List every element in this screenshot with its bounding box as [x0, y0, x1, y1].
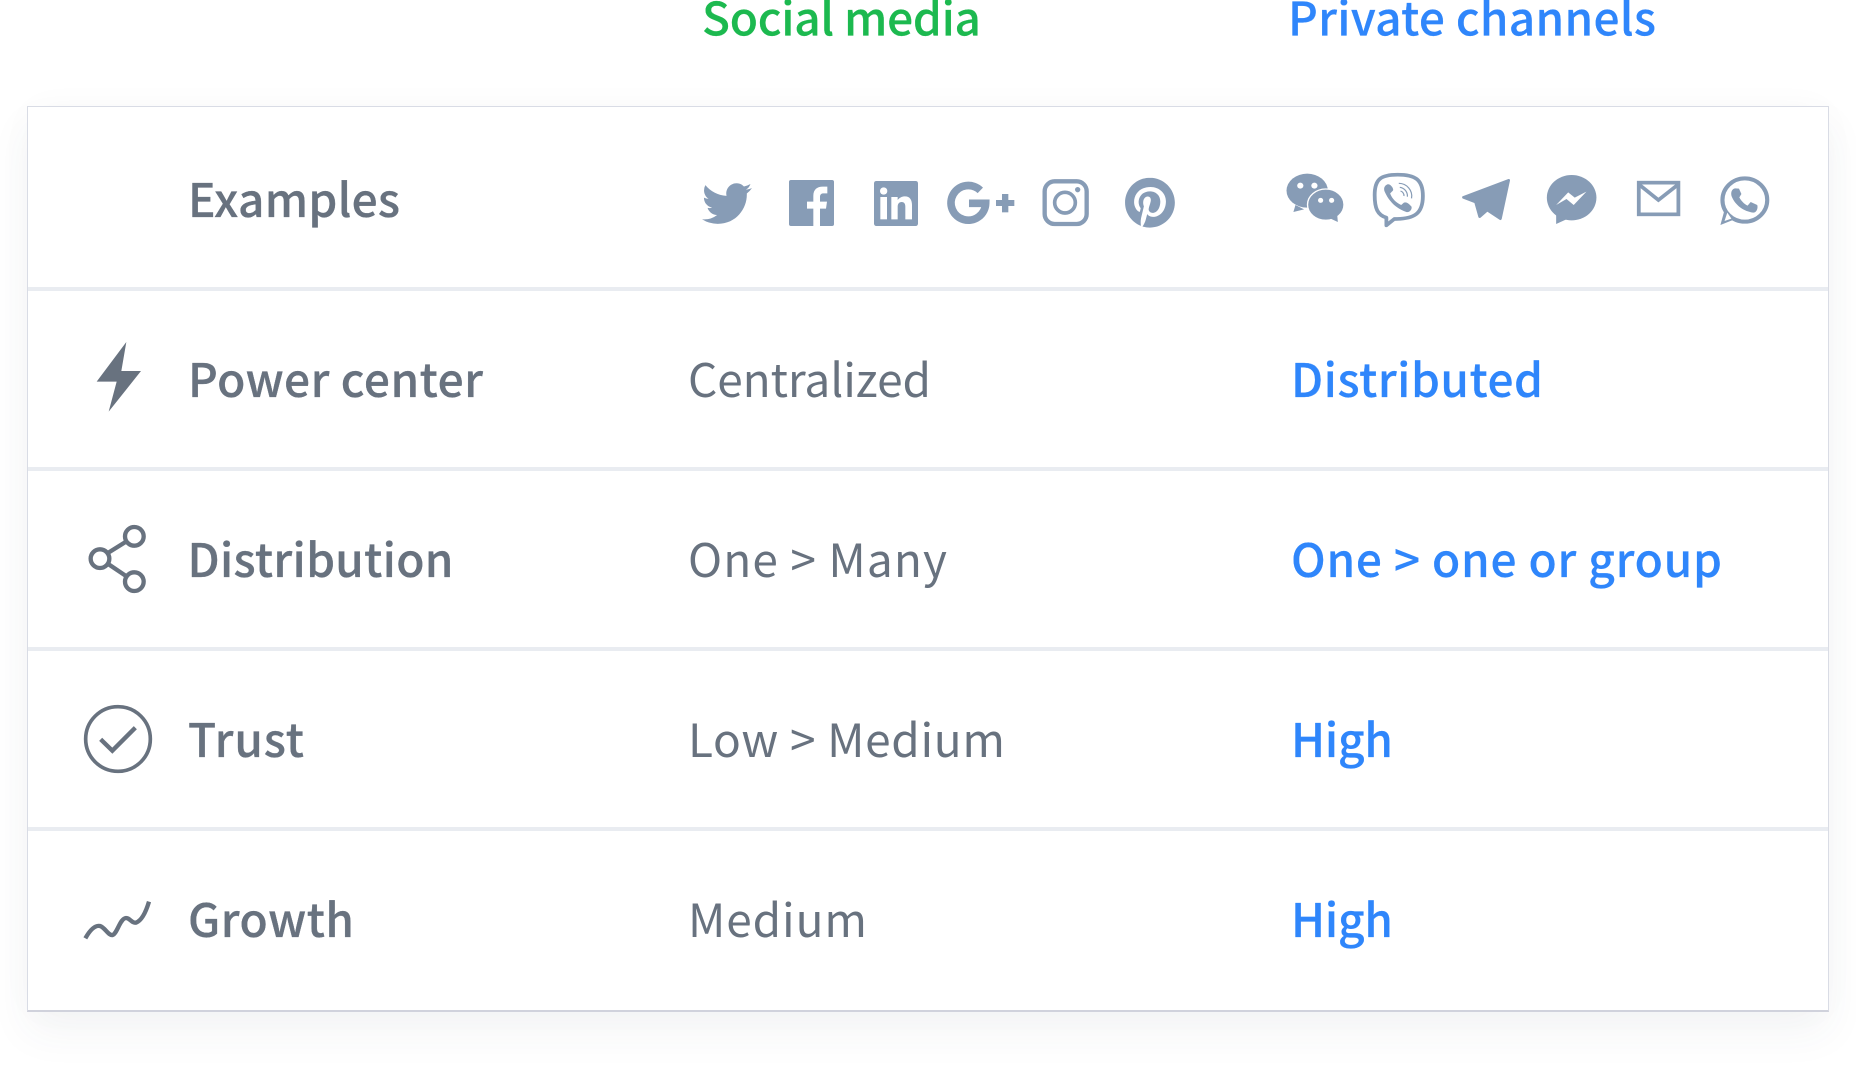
label: distribution: Distribution [188, 525, 454, 591]
value: one to many: One > Many [688, 525, 947, 591]
icon: linkedin [874, 181, 918, 226]
icon: google plus [951, 186, 1014, 220]
label: growth: Growth [188, 885, 354, 951]
icon: mail [1639, 183, 1678, 214]
icon: share nodes [91, 527, 144, 591]
label: power center: Power center [188, 345, 483, 411]
value: high: High [1291, 705, 1393, 771]
icon: telegram [1464, 180, 1509, 219]
icon: wechat [1287, 174, 1344, 222]
icon: instagram [1045, 181, 1087, 224]
row: examples [188, 165, 1767, 231]
label: trust: Trust [188, 705, 304, 771]
icon: twitter [702, 183, 752, 224]
icon: whatsapp [1720, 178, 1767, 225]
value: one to one or group: One > one or group [1291, 525, 1722, 591]
icon: messenger [1547, 175, 1596, 224]
icon: viber [1375, 175, 1423, 225]
private channel icons [1287, 174, 1767, 225]
row: growth [85, 885, 1393, 951]
social media icons [702, 178, 1175, 228]
row: power center [97, 342, 1543, 412]
icon: pinterest [1125, 178, 1175, 228]
icon: check circle [86, 707, 150, 771]
value: centralized: Centralized [688, 345, 931, 411]
row dividers [28, 287, 1828, 831]
icon: lightning bolt [97, 342, 141, 412]
value: high: High [1291, 885, 1393, 951]
label: examples: Examples [188, 165, 400, 231]
value: distributed: Distributed [1291, 345, 1543, 411]
value: low to medium: Low > Medium [688, 705, 1005, 771]
icon: facebook [789, 180, 834, 226]
row: trust [86, 705, 1393, 771]
row: distribution [91, 525, 1722, 591]
icon: growth squiggle [85, 902, 149, 938]
value: medium: Medium [688, 885, 867, 951]
